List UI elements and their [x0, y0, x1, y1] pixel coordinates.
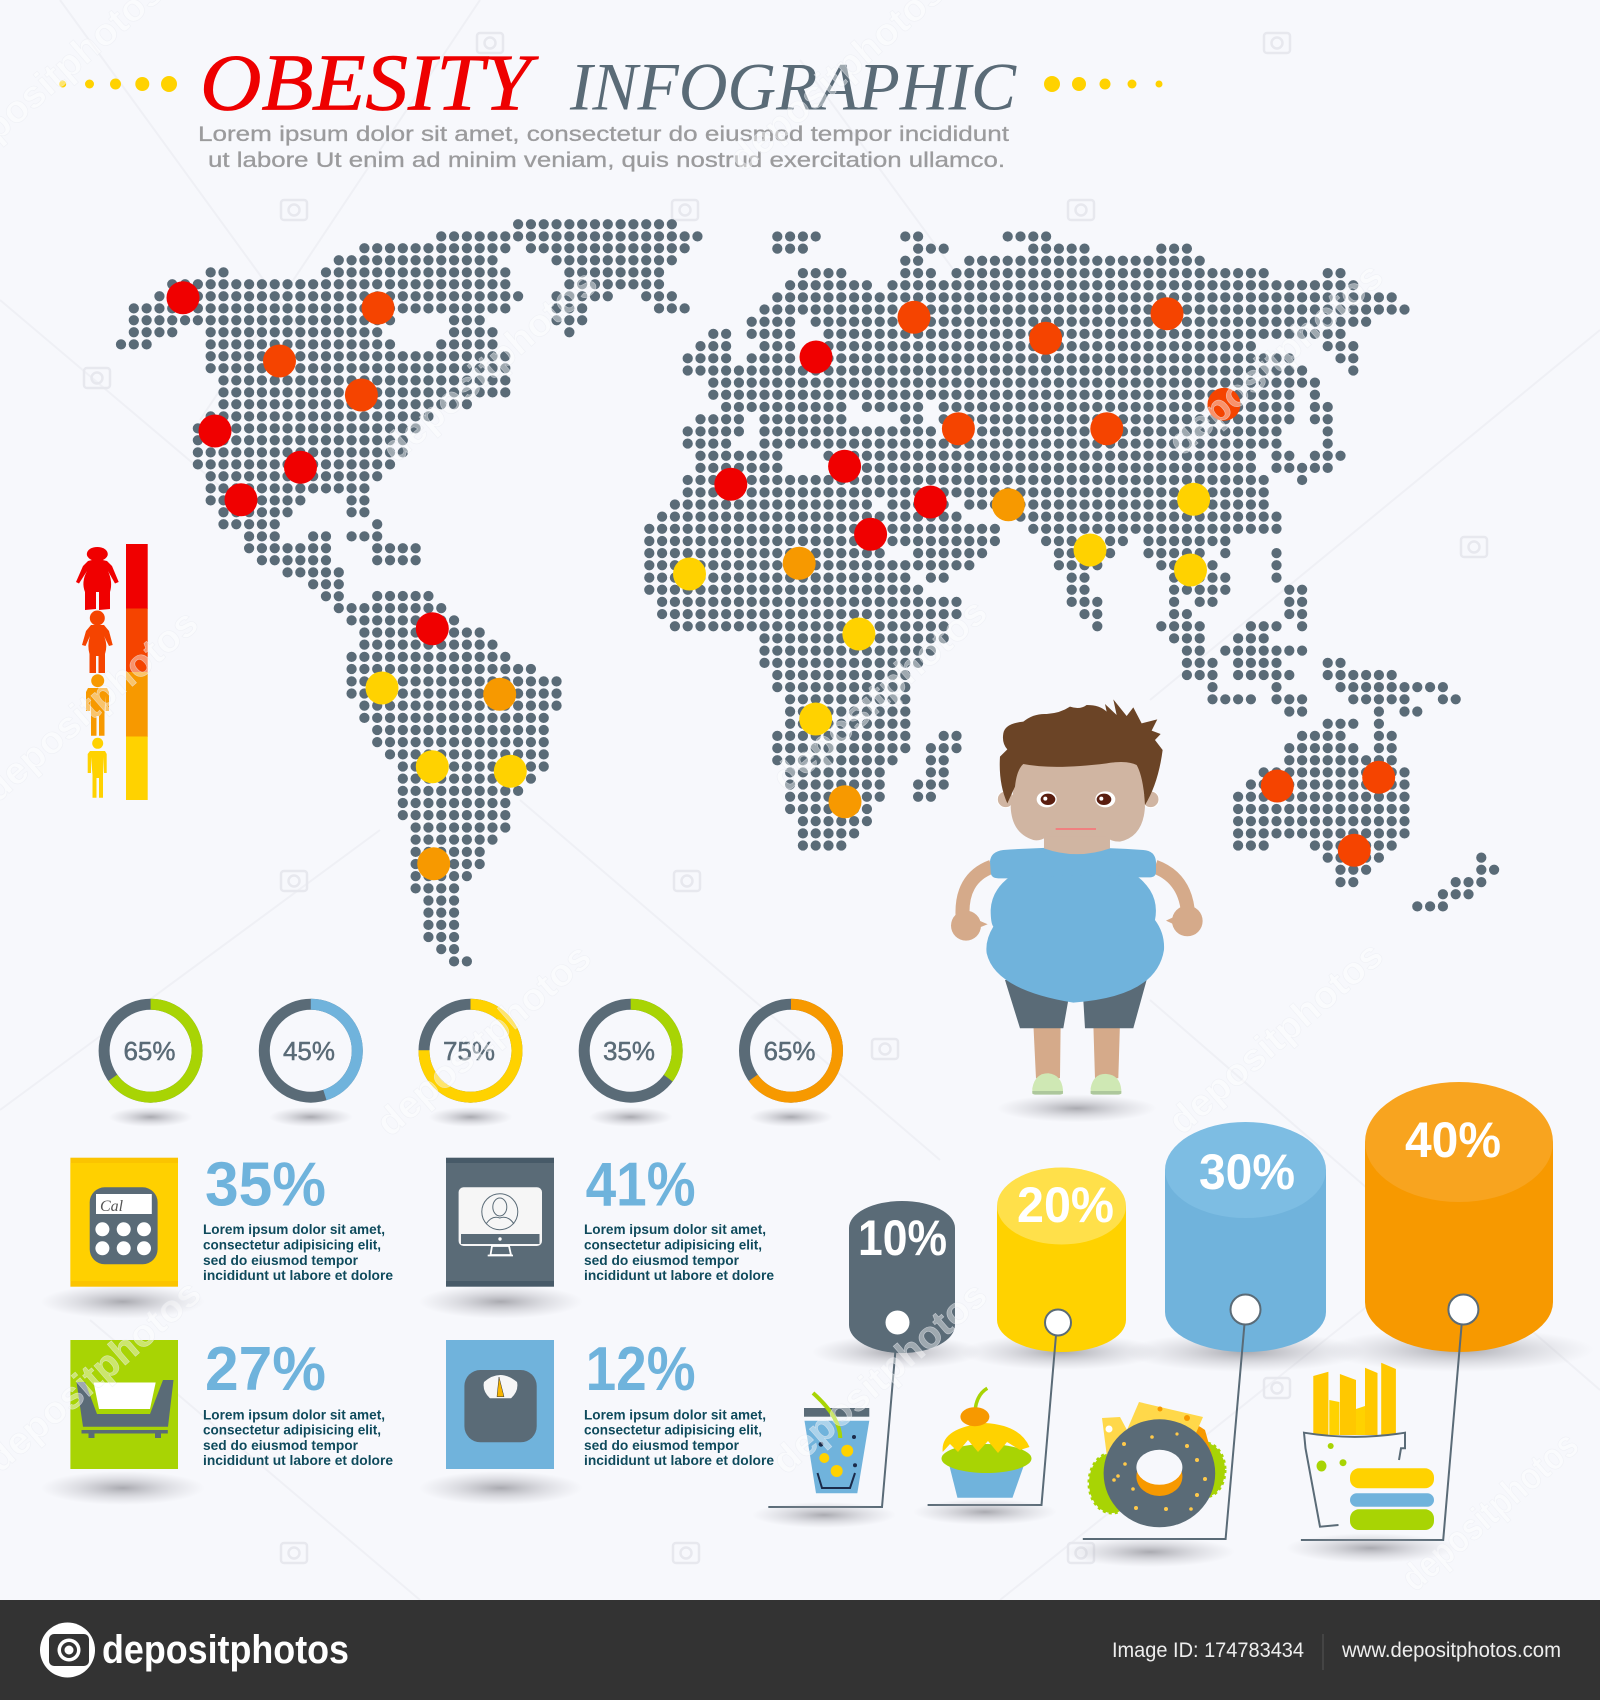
south america dots — [339, 596, 558, 961]
panel: monitor stat — [419, 1151, 774, 1319]
description: Lorem ipsum dolor sit amet, — [584, 1222, 766, 1237]
icon: soda drink — [752, 1393, 896, 1528]
hair — [1000, 699, 1163, 805]
icon: obese figure — [82, 610, 113, 673]
right dotted ornament — [1044, 76, 1162, 92]
card shadow — [419, 1471, 583, 1505]
hands — [951, 906, 1203, 941]
neck — [1044, 833, 1110, 854]
card shadow — [41, 1285, 205, 1319]
shirt — [986, 847, 1164, 1003]
ring 65% green — [104, 1004, 197, 1097]
ring 45% blue: 45% — [283, 1036, 335, 1066]
stat value: 12% — [586, 1335, 696, 1404]
icon: normal figure — [88, 738, 107, 798]
description: consectetur adipisicing elit, — [203, 1238, 381, 1253]
logo mark — [40, 1622, 95, 1678]
cylinder 40% orange: 40% — [1405, 1112, 1501, 1168]
description: sed do eiusmod tempor — [584, 1438, 740, 1453]
description: sed do eiusmod tempor — [203, 1253, 359, 1268]
logo text: depositphotos — [102, 1628, 349, 1672]
cylinder 10% gray: 10% — [858, 1210, 947, 1266]
description: sed do eiusmod tempor — [203, 1438, 359, 1453]
card shadow — [419, 1285, 583, 1319]
legend: obesity scale — [76, 544, 148, 800]
cylinder 30% blue — [1165, 1122, 1326, 1352]
icon: very obese figure — [76, 547, 119, 610]
icon: calculator: Cal — [100, 1198, 124, 1215]
panel: calculator stat — [41, 1151, 393, 1319]
card shadow — [41, 1471, 205, 1505]
yellow map markers — [366, 483, 1210, 788]
watermark text overlay: depositphotos — [1160, 255, 1392, 464]
description: incididunt ut labore et dolore — [584, 1453, 774, 1468]
ears — [997, 791, 1159, 808]
image id: Image ID: 174783434 — [1112, 1639, 1304, 1662]
cylinder shadows — [812, 1328, 1594, 1372]
ring 75% yellow — [424, 1004, 517, 1097]
website: www.depositphotos.com — [1341, 1639, 1561, 1662]
orange map markers — [417, 488, 1025, 880]
icon: bathroom scale — [446, 1340, 554, 1469]
ring 35% green: 35% — [603, 1036, 655, 1066]
description: Lorem ipsum dolor sit amet, — [203, 1222, 385, 1237]
icon: computer monitor — [446, 1158, 554, 1287]
description: sed do eiusmod tempor — [584, 1253, 740, 1268]
connector nodes — [886, 1294, 1478, 1336]
boy shadow — [997, 1094, 1157, 1122]
scale bar — [126, 544, 148, 800]
description: incididunt ut labore et dolore — [203, 1453, 393, 1468]
stat value: 35% — [205, 1151, 326, 1220]
shoes — [1032, 1073, 1121, 1095]
subtitle: ut labore Ut enim ad minim veniam, quis nostrud exercitation ullamco. — [208, 149, 1005, 172]
legs — [1033, 1023, 1120, 1078]
red map markers — [166, 281, 947, 645]
title — [59, 38, 1163, 172]
dotted world map — [121, 224, 1495, 961]
description: Lorem ipsum dolor sit amet, — [203, 1407, 385, 1422]
cylinder 20% yellow — [997, 1168, 1126, 1352]
cylinder 40% orange — [1365, 1082, 1553, 1352]
description: incididunt ut labore et dolore — [203, 1268, 393, 1283]
watermark text overlay: depositphotos — [374, 262, 606, 471]
panel: weight scale stat — [419, 1335, 774, 1505]
ring 65% green: 65% — [123, 1036, 176, 1066]
description: consectetur adipisicing elit, — [203, 1423, 381, 1438]
watermark text overlay: depositphotos — [764, 591, 996, 800]
shorts — [1005, 980, 1147, 1028]
eurasia africa australia dots — [649, 236, 1495, 906]
chart: cylinder bars — [812, 1082, 1594, 1372]
description: Lorem ipsum dolor sit amet, — [584, 1407, 766, 1422]
eyes — [1037, 791, 1115, 807]
panel: sofa stat — [41, 1335, 393, 1505]
cylinder 10% gray — [849, 1201, 955, 1353]
cylinder 20% yellow: 20% — [1017, 1177, 1114, 1233]
subtitle: Lorem ipsum dolor sit amet, consectetur do eiusmod tempor incididunt — [198, 123, 1009, 146]
north america dots — [121, 224, 699, 596]
ring 45% blue — [264, 1004, 357, 1097]
footer bar — [0, 1600, 1600, 1700]
heading: obesity: OBESITY — [200, 38, 539, 128]
icon: donut burger — [1065, 1402, 1235, 1567]
left dotted ornament — [59, 76, 177, 92]
stat value: 27% — [205, 1335, 326, 1404]
icon: cupcake — [913, 1388, 1057, 1525]
ring 65% orange: 65% — [763, 1036, 816, 1066]
face — [1011, 762, 1145, 842]
ring shadows — [109, 1107, 833, 1127]
ring 35% green — [584, 1004, 677, 1097]
progress rings — [104, 1004, 838, 1127]
watermark text overlay: depositphotos — [764, 1274, 996, 1483]
description: consectetur adipisicing elit, — [584, 1238, 762, 1253]
cylinder 30% blue: 30% — [1199, 1144, 1295, 1200]
watermark text overlay: depositphotos — [368, 936, 600, 1145]
description: consectetur adipisicing elit, — [584, 1423, 762, 1438]
character: obese boy — [951, 699, 1203, 1122]
subtitle — [198, 123, 1009, 172]
ring 65% orange — [744, 1004, 838, 1097]
description — [203, 1222, 393, 1283]
red-orange map markers — [263, 292, 1395, 867]
arms — [962, 867, 1188, 918]
description — [584, 1222, 774, 1283]
ring 75% yellow: 75% — [443, 1036, 495, 1066]
icon: calculator — [70, 1158, 178, 1287]
stat value: 41% — [586, 1151, 696, 1220]
description — [203, 1407, 393, 1468]
heading: infographic: INFOGRAPHIC — [569, 48, 1017, 124]
mouth — [1056, 826, 1096, 832]
description — [584, 1407, 774, 1468]
description: incididunt ut labore et dolore — [584, 1268, 774, 1283]
icon: overweight figure — [86, 674, 109, 736]
connector lines — [768, 1325, 1462, 1540]
icon: sofa — [70, 1340, 178, 1469]
watermark text overlay: depositphotos — [1160, 934, 1392, 1143]
icon: fries and burger — [1286, 1363, 1456, 1563]
